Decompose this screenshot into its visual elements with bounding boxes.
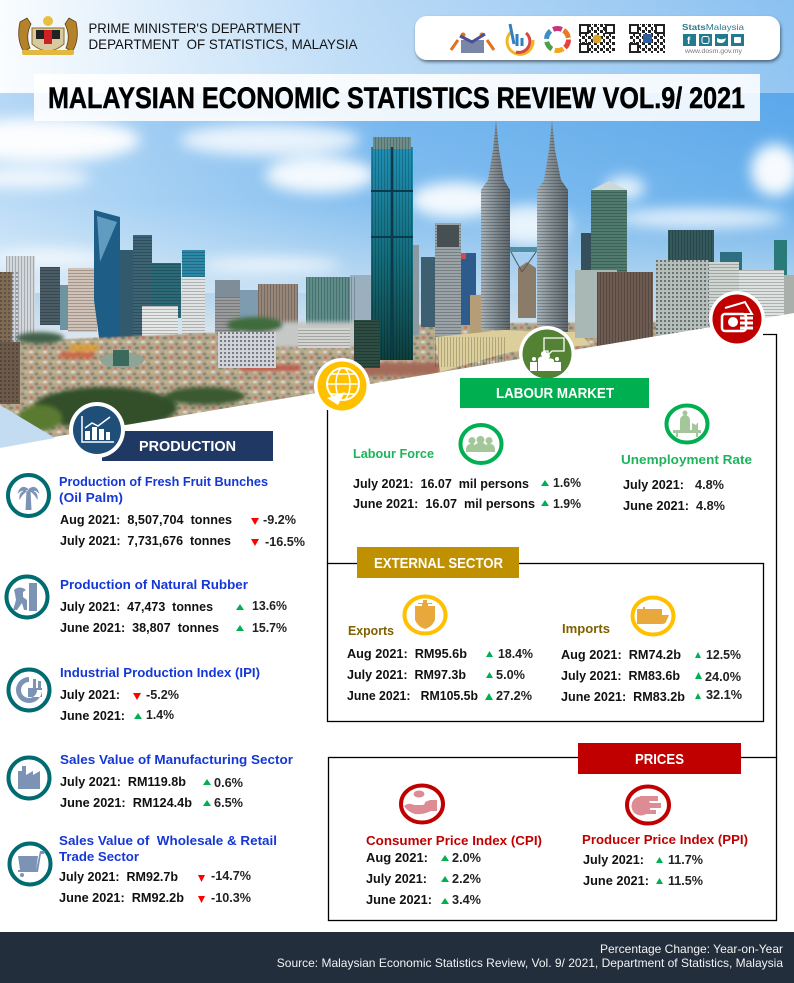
twin towers [481,120,568,332]
metric: industrial production index: -5.2% [146,688,179,702]
footer source note: Source: Malaysian Economic Statistics Review, Vol. 9/ 2021, Department of Statistics, Malaysia [277,956,783,970]
footer source note [0,932,794,983]
metric: sales value of wholesale and retail: -14.7% [211,869,251,883]
faded header band [0,0,794,93]
metric: unemployment rate: Unemployment Rate [621,453,752,467]
right buildings [575,181,794,347]
metric: fresh fruit bunches: (Oil Palm) [59,491,123,505]
metric: natural rubber [6,576,287,635]
light blue corner triangle [0,405,55,448]
panel: labour market [353,326,752,513]
mid towers and podium [421,223,590,372]
prices heading [578,743,741,774]
main glass tower [354,137,419,368]
external sector heading [357,547,519,578]
metric: industrial production index: June 2021: [60,709,125,723]
metric: sales value of manufacturing: 6.5% [214,796,243,810]
header: department names: DEPARTMENT OF STATISTICS, MALAYSIA [88,36,358,52]
left foreground building [0,272,20,404]
metric: exports: Aug 2021: RM95.6b [347,647,467,661]
metric: imports [561,598,742,704]
metric: natural rubber: June 2021: 38,807 tonnes [60,621,219,635]
StatsMalaysia social block [682,22,744,55]
metric: unemployment rate: June 2021: [623,499,689,513]
metric: producer price index: June 2021: [583,874,649,888]
outer frame lines [328,334,776,758]
metric: imports: Imports [562,622,610,636]
icon: external sector globe [314,358,370,414]
metric: sales value of manufacturing: Sales Value of Manufacturing Sector [60,753,293,767]
external sector heading: EXTERNAL SECTOR [374,555,503,572]
StatsMalaysia social block: www.dosm.gov.my [684,49,742,55]
metric: imports: Aug 2021: RM74.2b [561,648,681,662]
metric: sales value of manufacturing: June 2021: RM124.4b [60,796,192,810]
metric: imports: 12.5% [706,648,741,662]
metric: sales value of wholesale and retail: -10.3% [211,891,251,905]
metric: sales value of manufacturing: July 2021: RM119.8b [60,775,186,789]
panel: prices [328,743,776,920]
metric: labour force: 1.6% [553,476,581,490]
production heading: PRODUCTION [139,438,236,455]
footer source note: Percentage Change: Year-on-Year [600,942,783,956]
metric: imports: July 2021: RM83.6b [561,669,680,683]
metric: fresh fruit bunches [8,475,305,549]
metric: fresh fruit bunches: Aug 2021: 8,507,704 tonnes [60,513,232,527]
metric: exports: July 2021: RM97.3b [347,668,466,682]
icon: prices money [709,291,765,347]
header: department names [88,20,358,52]
metric: consumer price index: July 2021: [366,872,427,886]
metric: consumer price index: Aug 2021: [366,851,428,865]
icon: census logo [451,32,494,53]
metric: sales value of wholesale and retail: July 2021: RM92.7b [59,870,178,884]
metric: fresh fruit bunches: July 2021: 7,731,676 tonnes [60,534,231,548]
metric: imports: 32.1% [706,688,742,702]
metric: industrial production index: 1.4% [146,708,174,722]
StatsMalaysia social block: Stats Malaysia [682,22,744,32]
metric: sales value of wholesale and retail: Trade Sector [59,850,139,864]
far buildings [215,275,371,330]
panel: external sector [328,547,764,722]
metric: labour force [353,425,581,511]
metric: exports: Exports [348,624,394,638]
labour market heading: LABOUR MARKET [496,385,614,402]
metric: consumer price index [366,786,542,907]
header: logo panel [415,16,780,60]
metric: imports: June 2021: RM83.2b [561,690,685,704]
metric: sales value of wholesale and retail [10,834,277,905]
metric: producer price index: Producer Price Index (PPI) [582,833,748,847]
metric: fresh fruit bunches: -16.5% [265,535,305,549]
metric: industrial production index [8,666,260,723]
metric: unemployment rate: 4.8% [695,478,724,492]
metric: consumer price index: 2.0% [452,851,481,865]
production heading [69,402,273,461]
ground and construction [0,314,710,437]
metric: exports: 27.2% [496,689,532,703]
metric: consumer price index: Consumer Price Index (CPI) [366,834,542,848]
left buildings [6,210,240,345]
metric: consumer price index: 2.2% [452,872,481,886]
metric: unemployment rate [621,406,752,513]
metric: industrial production index: July 2021: [60,688,120,702]
metric: producer price index: 11.7% [668,853,703,867]
metric: exports [347,596,533,703]
metric: labour force: June 2021: 16.07 mil persons [353,497,535,511]
icon: QR code 2 [629,24,665,53]
icon: QR code 1 [579,24,615,53]
metric: producer price index: 11.5% [668,874,703,888]
title band [34,74,760,121]
metric: industrial production index: Industrial Production Index (IPI) [60,666,260,680]
icon: swirl logo [507,24,533,54]
metric: sales value of wholesale and retail: June 2021: RM92.2b [59,891,184,905]
metric: labour force: July 2021: 16.07 mil persons [353,477,529,491]
metric: producer price index [582,786,748,888]
metric: imports: 24.0% [705,670,741,684]
StatsMalaysia social block: f [687,36,691,47]
icon: SDG wheel [546,28,568,50]
header: department names: PRIME MINISTER'S DEPARTMENT [88,20,301,36]
metric: exports: 5.0% [496,668,525,682]
metric: sales value of manufacturing [8,753,293,810]
header: coat of arms [19,16,77,55]
metric: fresh fruit bunches: Production of Fresh Fruit Bunches [59,475,268,489]
city skyline photo [0,0,794,450]
metric: exports: 18.4% [498,647,533,661]
metric: fresh fruit bunches: -9.2% [263,513,296,527]
metric: sales value of manufacturing: 0.6% [214,776,243,790]
metric: labour force: Labour Force [353,447,434,461]
metric: unemployment rate: 4.8% [696,499,725,513]
metric: unemployment rate: July 2021: [623,478,684,492]
metric: labour force: 1.9% [553,497,581,511]
panel: production [6,402,305,905]
metric: consumer price index: 3.4% [452,893,481,907]
metric: natural rubber: Production of Natural Rubber [60,578,248,592]
metric: exports: June 2021: RM105.5b [347,689,478,703]
labour market heading [460,326,649,408]
prices heading: PRICES [635,751,684,768]
metric: sales value of wholesale and retail: Sales Value of Wholesale & Retail [59,834,277,848]
metric: producer price index: July 2021: [583,853,644,867]
metric: natural rubber: July 2021: 47,473 tonnes [60,600,213,614]
metric: consumer price index: June 2021: [366,893,432,907]
metric: natural rubber: 13.6% [252,599,287,613]
metric: natural rubber: 15.7% [252,621,287,635]
